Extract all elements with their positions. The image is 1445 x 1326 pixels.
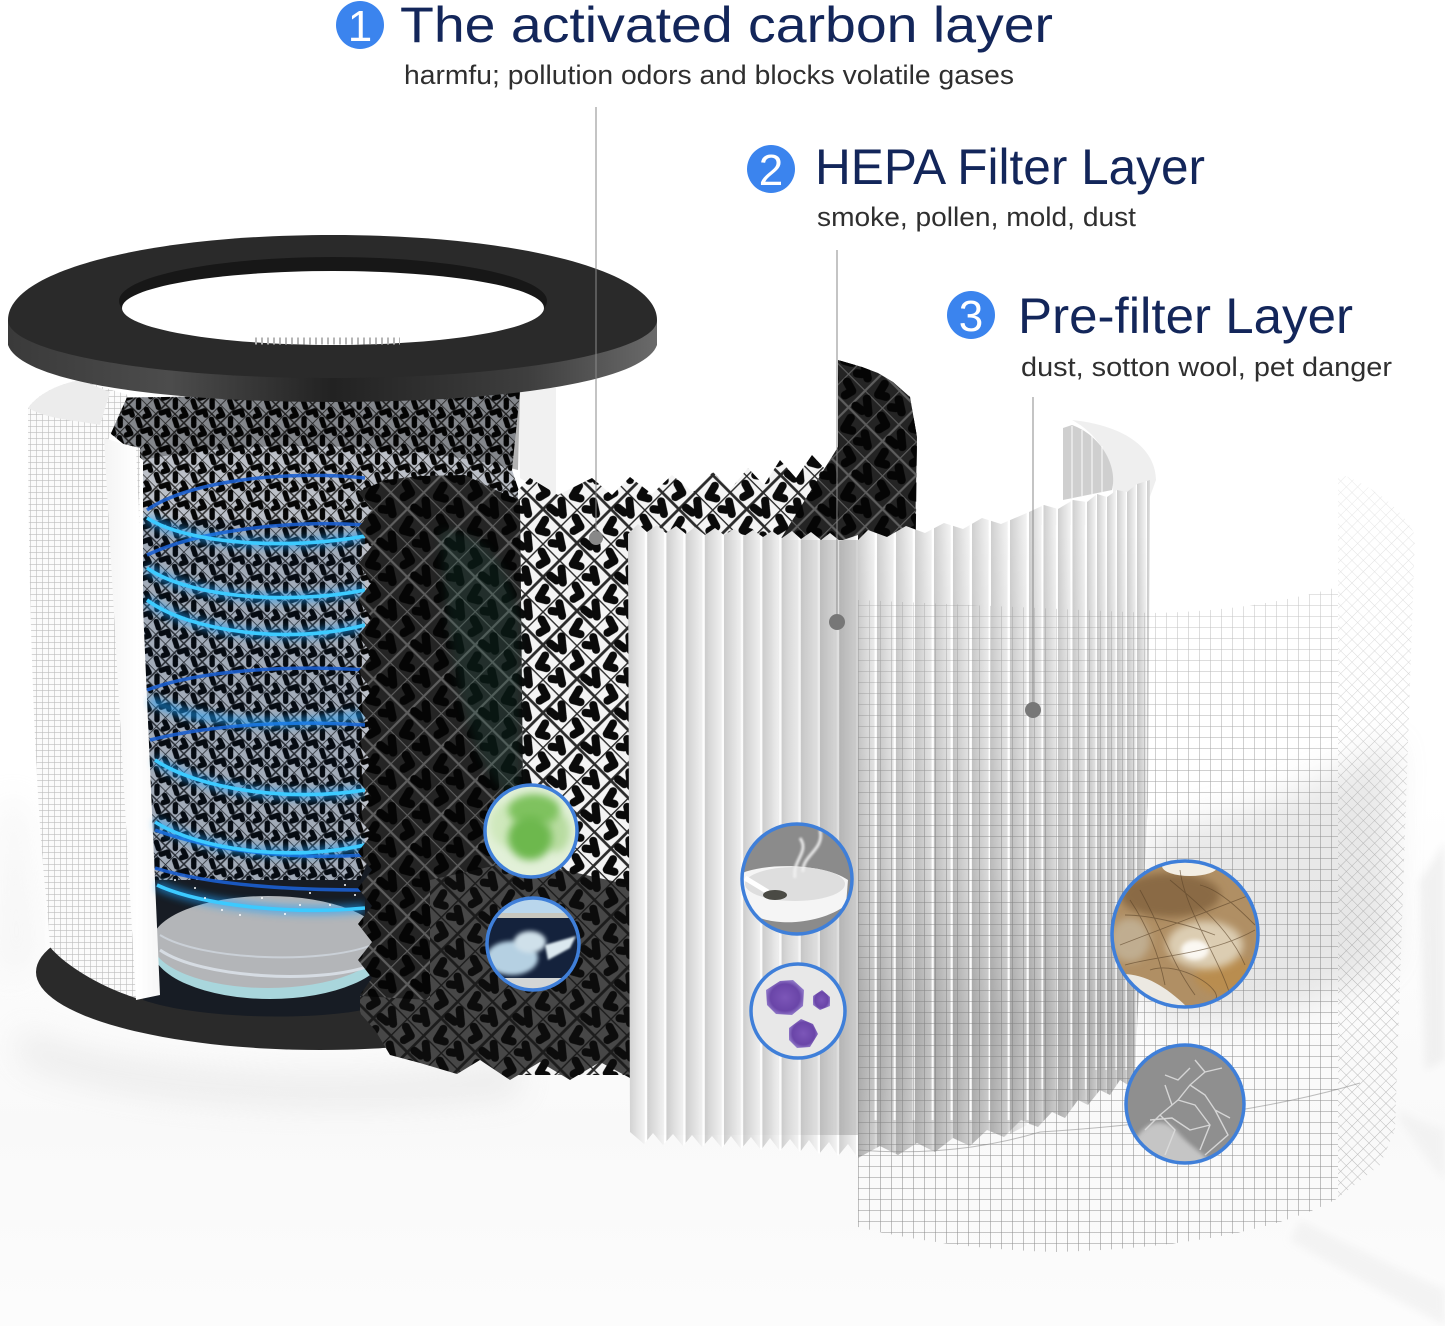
HEPA pleated layer <box>628 420 1156 1158</box>
dark overlapping section <box>358 475 524 1040</box>
callout: pre-filter layer <box>947 288 1392 382</box>
number badge 2 <box>747 145 795 195</box>
icon: green odor cloud <box>485 785 577 877</box>
text: pre-filter layer description: dust, sotton wool, pet danger <box>1021 352 1392 382</box>
carbon cylinder shading <box>92 392 520 470</box>
inner carbon cylinder <box>92 392 522 880</box>
number badge 3 <box>947 291 995 341</box>
carbon cylinder blue tint <box>143 520 360 880</box>
glass disc base <box>152 896 388 999</box>
text: HEPA layer description: smoke, pollen, mold, dust <box>817 202 1137 232</box>
number badge 2: 2 <box>759 146 783 195</box>
icon: pet hair <box>1110 856 1260 1010</box>
rear pleat section <box>858 480 1150 1158</box>
dark upper flap <box>780 360 917 540</box>
number badge 1 <box>336 1 384 51</box>
rear curved strip <box>1063 420 1156 502</box>
leader line: HEPA layer <box>829 250 845 630</box>
pre-filter mesh layer <box>858 473 1415 1252</box>
heading: HEPA layer: HEPA Filter Layer <box>815 139 1205 195</box>
green tint <box>440 530 520 800</box>
mesh seam curve <box>858 1083 1360 1152</box>
number badge 1: 1 <box>348 2 372 51</box>
cylinder dark interior <box>143 860 383 1016</box>
callout: activated carbon layer <box>336 0 1053 90</box>
icon: cigarette ash tray smoke <box>740 822 854 936</box>
icon: cotton fibre <box>1125 1044 1245 1165</box>
white pleat wrap with cell grid <box>28 380 160 1000</box>
leader line: carbon layer <box>589 107 603 545</box>
rear white pleat edge <box>518 388 556 500</box>
icon: steam gas <box>485 895 581 994</box>
front panel shade <box>628 540 858 1135</box>
front pleat panel <box>628 524 858 1158</box>
lower grey lattice section <box>360 860 630 1080</box>
filter cylinder assembly <box>8 235 657 1050</box>
rear pleat grey shading <box>858 480 1150 1158</box>
text: carbon layer description: harmfu; pollution odors and blocks volatile gases <box>404 60 1014 90</box>
callout: HEPA layer <box>747 139 1205 232</box>
light lattice section <box>518 360 917 1075</box>
rear pleat bright edges <box>858 560 1029 1120</box>
number badge 3: 3 <box>959 292 983 341</box>
top end cap ring <box>8 235 657 402</box>
blue air swirl <box>147 475 365 916</box>
soft shadow band <box>1150 740 1395 1022</box>
leader line: pre-filter layer <box>1025 397 1041 718</box>
mesh grid <box>858 473 1415 1252</box>
bottom end cap ring <box>36 894 604 1050</box>
icon: mold spores <box>751 964 845 1058</box>
carbon filter sheet <box>358 360 917 1080</box>
heading: pre-filter layer: Pre-filter Layer <box>1018 288 1353 344</box>
